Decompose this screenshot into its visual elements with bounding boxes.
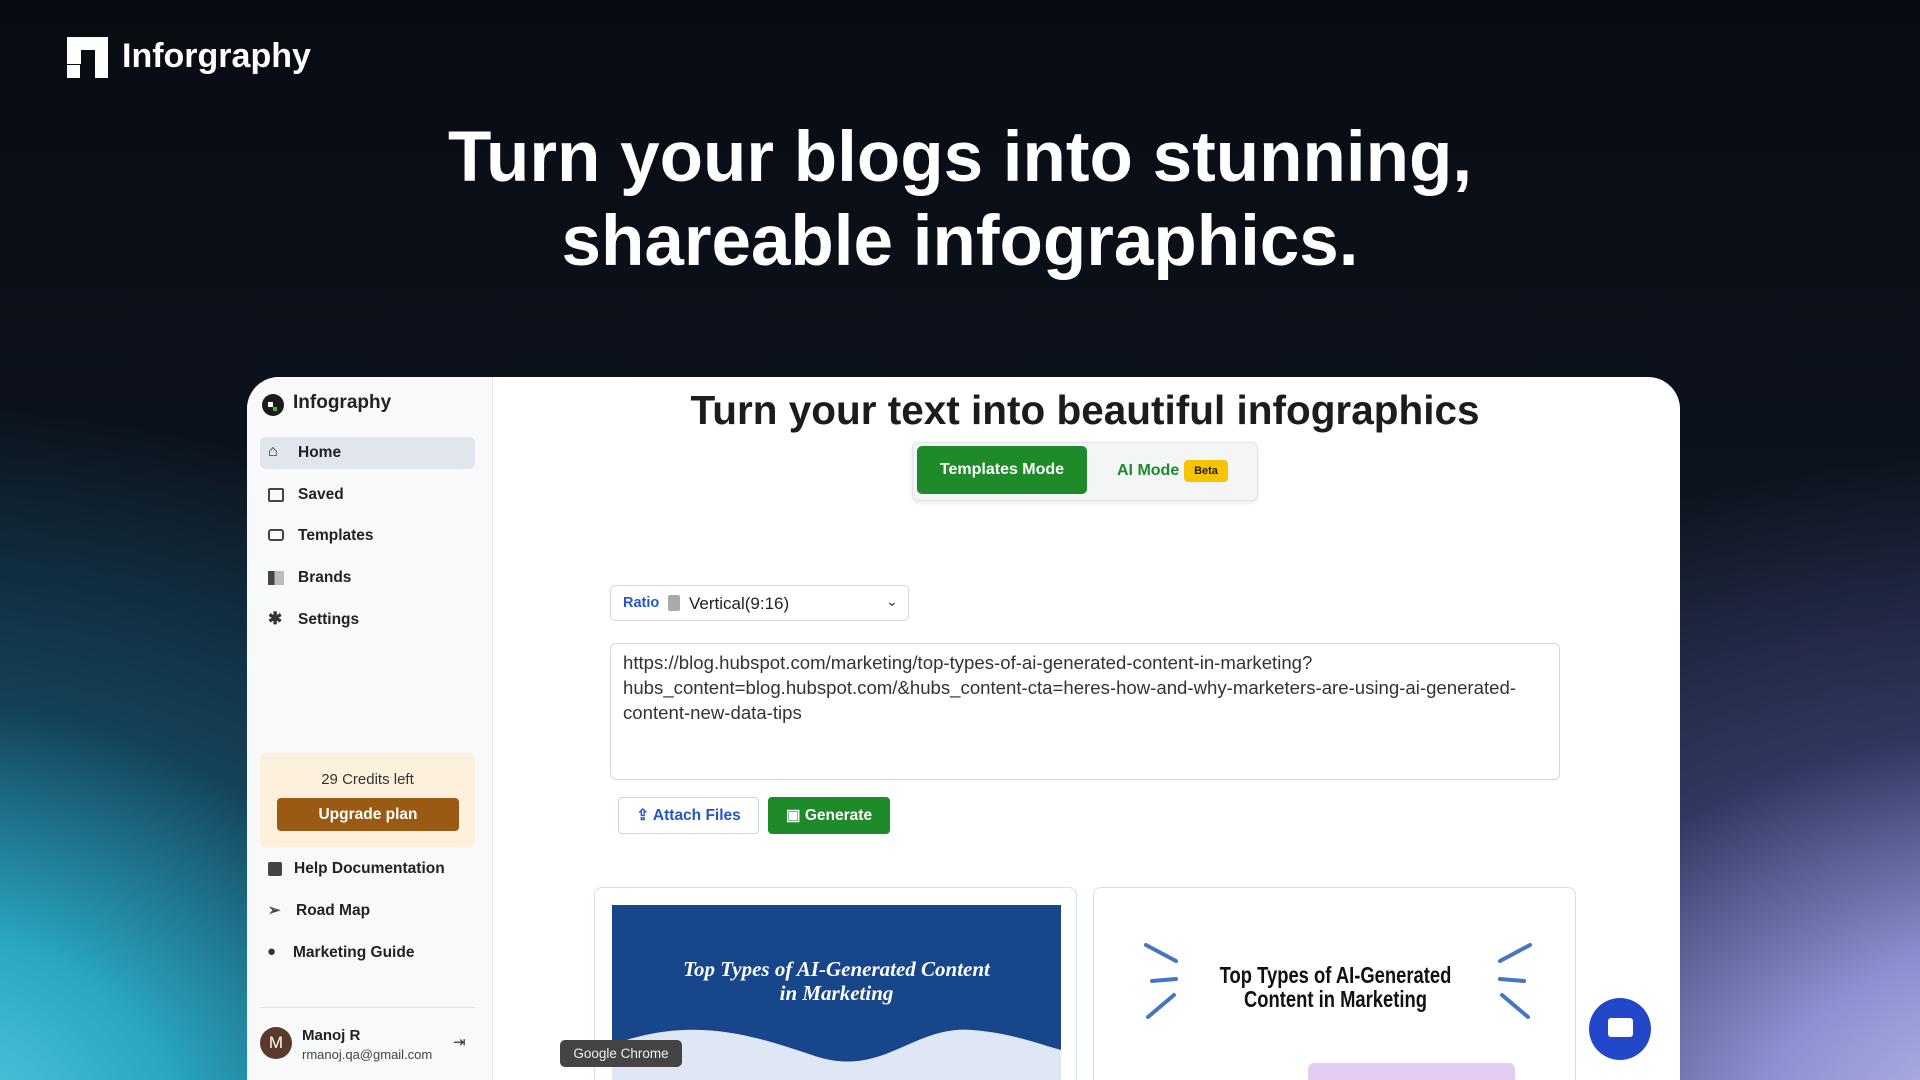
- ratio select: Vertical(9:16): [689, 594, 789, 613]
- sidebar: Home: [298, 444, 341, 461]
- credits box: 29 Credits left: [321, 771, 414, 788]
- user profile: ⇥: [453, 1034, 466, 1051]
- nav: brands: [268, 569, 351, 586]
- brand name: Inforgraphy: [122, 37, 311, 75]
- attach files button: [618, 797, 759, 834]
- user profile: rmanoj.qa@gmail.com: [302, 1047, 432, 1062]
- nav: help documentation: Help Documentation: [294, 860, 445, 877]
- mode toggle: [912, 442, 1258, 501]
- headline: [448, 118, 1472, 281]
- templates mode button: [917, 446, 1087, 494]
- nav: settings: [268, 609, 359, 628]
- sidebar: [247, 377, 493, 1080]
- credits box: [260, 753, 475, 847]
- attach files button: ⇪ Attach Files: [636, 807, 741, 824]
- headline: shareable infographics.: [561, 202, 1359, 281]
- nav: saved: Saved: [298, 486, 344, 503]
- sidebar: ●: [267, 943, 276, 960]
- sidebar logo: [262, 392, 392, 416]
- generate button: [768, 797, 890, 834]
- url textarea: https://blog.hubspot.com/marketing/top-types-of-ai-generated-content-in-marketing?: [623, 652, 1312, 673]
- blue preview: [612, 905, 1061, 1080]
- chat bubble: [1589, 998, 1651, 1060]
- beta badge: Beta: [1194, 465, 1218, 477]
- nav: settings: Settings: [298, 611, 359, 628]
- user profile: [260, 1027, 466, 1062]
- sidebar: ➢: [268, 902, 281, 919]
- sidebar: ✱: [268, 609, 282, 628]
- headline: Turn your blogs into stunning,: [448, 118, 1472, 197]
- ratio select: ⌄: [886, 593, 898, 609]
- url textarea: content-new-data-tips: [623, 702, 802, 723]
- card 2 title: Top Types of AI-Generated: [1220, 962, 1451, 988]
- template card 2: [1093, 887, 1576, 1080]
- user profile: M: [269, 1033, 283, 1052]
- sidebar: ⌂: [268, 443, 278, 460]
- ratio select: Ratio: [623, 595, 659, 611]
- upgrade button: Upgrade plan: [318, 806, 418, 823]
- templates mode button: Templates Mode: [940, 461, 1064, 478]
- generate button: ▣ Generate: [786, 807, 872, 824]
- tooltip: Google Chrome: [560, 1040, 682, 1067]
- url textarea: hubs_content=blog.hubspot.com/&hubs_content-cta=heres-how-and-why-marketers-are-using-ai-generated-: [623, 677, 1516, 698]
- blue preview: in Marketing: [780, 981, 893, 1005]
- url textarea: [610, 643, 1560, 780]
- nav: templates: Templates: [298, 527, 374, 544]
- user profile: Manoj R: [302, 1027, 360, 1044]
- tooltip: Google Chrome: Google Chrome: [573, 1046, 669, 1061]
- main title: Turn your text into beautiful infographics: [690, 387, 1480, 433]
- nav: marketing guide: Marketing Guide: [293, 944, 414, 961]
- decorative rays: [1144, 943, 1532, 1020]
- nav: home (active): [260, 437, 475, 469]
- card 2 title: Content in Marketing: [1244, 986, 1427, 1012]
- sidebar logo: Infography: [293, 392, 391, 413]
- nav: road map: Road Map: [296, 902, 370, 919]
- blue preview: Top Types of AI-Generated Content: [683, 957, 990, 981]
- card 2 title: [1220, 962, 1451, 1012]
- icon: logo mark: [67, 37, 108, 78]
- AI mode: AI Mode: [1117, 462, 1179, 479]
- brand logo: [67, 37, 311, 78]
- nav: saved: [268, 486, 344, 503]
- app screenshot panel: [247, 377, 1680, 1080]
- ratio select: [610, 585, 909, 621]
- nav: brands: Brands: [298, 569, 351, 586]
- beta badge: [1184, 460, 1228, 482]
- template card 1: [594, 887, 1077, 1080]
- upgrade button: [277, 798, 459, 831]
